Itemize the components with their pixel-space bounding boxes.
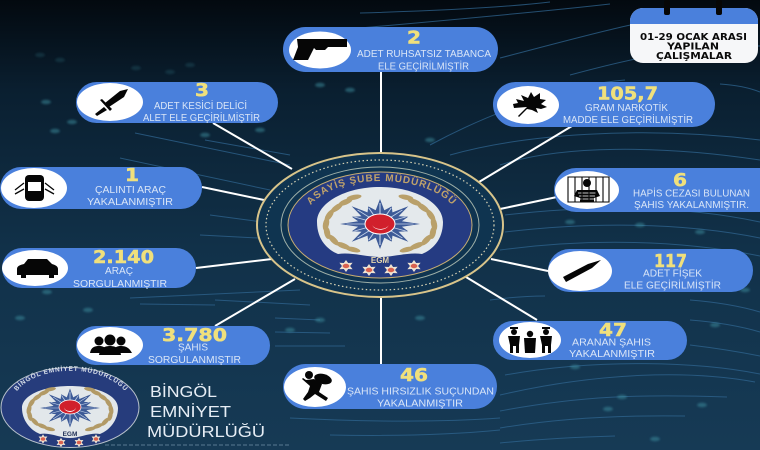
central emblem: Asayiş Şube Müdürlüğü — [256, 152, 504, 298]
pill: 2 tabanca: ADET RUHSATSIZ TABANCA — [357, 49, 491, 60]
pill: 3 kesici delici: ALET ELE GEÇİRİLMİŞTİR — [143, 111, 260, 124]
icon: cannabis leaf — [513, 92, 547, 117]
badge curved title — [10, 371, 133, 409]
pill: 2.140 arac: SORGULANMIŞTIR — [73, 279, 167, 290]
pill: 6 hapis: 6 — [673, 170, 687, 191]
pill: 3.780 sahis: SORGULANMIŞTIR — [148, 355, 241, 366]
badge star — [40, 388, 100, 428]
pill: 47 aranan sahis: 47 — [599, 320, 627, 341]
pill: 6 hapis: HAPİS CEZASI BULUNAN — [633, 186, 750, 200]
pill: 1 calinti arac — [0, 165, 202, 209]
pill: 105,7 narkotik: GRAM NARKOTİK — [585, 101, 668, 114]
pill: 46 hirsizlik: YAKALANMIŞTIR — [377, 398, 463, 410]
pill: 2.140 arac: 2.140 — [93, 247, 154, 268]
pill: 3.780 sahis — [76, 325, 270, 366]
pill: 3 kesici delici — [76, 80, 278, 124]
emblem EGM: EGM — [371, 256, 389, 265]
heading: Bingöl Emniyet Müdürlüğü: MÜDÜRLÜĞÜ — [147, 423, 265, 441]
pill: 47 aranan sahis — [493, 320, 687, 360]
heading: Bingöl Emniyet Müdürlüğü — [147, 383, 265, 441]
pill: 47 aranan sahis: YAKALANMIŞTIR — [569, 349, 655, 360]
icon: stolen car — [15, 175, 54, 201]
pill: 6 hapis: ŞAHIS YAKALANMIŞTIR. — [634, 200, 749, 211]
pill: 105,7 narkotik: 105,7 — [597, 84, 658, 104]
calendar text: YAPILAN — [666, 42, 719, 52]
icon: prisoner behind bars — [568, 177, 609, 202]
pill: 3.780 sahis: ŞAHIS — [178, 342, 208, 354]
pill: 3.780 sahis: 3.780 — [162, 325, 227, 346]
pill: 46 hirsizlik: 46 — [400, 365, 428, 386]
icon: bullet — [563, 260, 601, 282]
pill: 2 tabanca: ELE GEÇİRİLMİŞTİR — [378, 60, 469, 72]
pill: 105,7 narkotik: MADDE ELE GEÇİRİLMİŞTİR — [563, 113, 693, 126]
pill: 3 kesici delici: ADET KESİCİ DELİCİ — [154, 99, 247, 112]
calendar text: ÇALIŞMALAR — [656, 51, 732, 62]
pill: 46 hirsizlik: ŞAHIS HIRSIZLIK SUÇUNDAN — [347, 386, 494, 398]
provincial emblem: Bingöl Emniyet Müdürlüğü: BİNGÖL EMNİYET MÜDÜRLÜĞÜ — [14, 366, 128, 391]
badge EGM: EGM — [63, 431, 77, 438]
icon: pistol — [293, 39, 347, 60]
icon: group of people — [90, 334, 132, 355]
pill: 2 tabanca: 2 — [407, 28, 421, 48]
pill: 1 calinti arac: ÇALINTI ARAÇ — [95, 185, 166, 196]
pill: 3 kesici delici: 3 — [195, 80, 209, 101]
calendar card — [630, 0, 758, 63]
icon: thief with sack — [302, 371, 333, 401]
icon: dagger — [95, 89, 128, 116]
pill: 6 hapis — [554, 168, 760, 212]
pill: 117 fisek — [548, 249, 753, 292]
provincial emblem: Bingöl Emniyet Müdürlüğü — [0, 366, 140, 448]
pill: 2.140 arac: ARAÇ — [105, 266, 133, 277]
icon: two officers and suspect — [508, 327, 552, 353]
pill: 2.140 arac — [2, 247, 196, 290]
emblem wreath — [322, 194, 438, 254]
calendar text: 01-29 OCAK ARASI — [640, 32, 747, 43]
badge wreath — [26, 386, 114, 432]
emblem curved title — [306, 181, 458, 214]
pill: 105,7 narkotik — [493, 82, 715, 127]
pill: 2 tabanca — [283, 27, 498, 72]
pill: 47 aranan sahis: ARANAN ŞAHIS — [572, 338, 651, 348]
heading: Bingöl Emniyet Müdürlüğü: BİNGÖL — [150, 383, 217, 401]
pill: 46 hirsizlik — [283, 364, 497, 410]
icon: car — [17, 259, 58, 278]
badge small stars — [39, 434, 100, 447]
pill: 1 calinti arac: 1 — [125, 165, 139, 186]
central emblem: Asayiş Şube Müdürlüğü: ASAYİŞ ŞUBE MÜDÜRLÜĞÜ — [308, 174, 457, 205]
emblem white field — [317, 187, 443, 257]
heading: Bingöl Emniyet Müdürlüğü: EMNİYET — [150, 403, 232, 421]
calendar text — [640, 32, 747, 62]
emblem small stars — [339, 260, 421, 276]
pill: 117 fisek: ADET FİŞEK — [643, 266, 702, 280]
pill: 117 fisek: 117 — [654, 251, 687, 272]
pill: 117 fisek: ELE GEÇİRİLMİŞTİR — [624, 278, 721, 292]
pill: 1 calinti arac: YAKALANMIŞTIR — [87, 197, 173, 208]
emblem star — [340, 199, 420, 249]
connector lines — [196, 71, 572, 365]
